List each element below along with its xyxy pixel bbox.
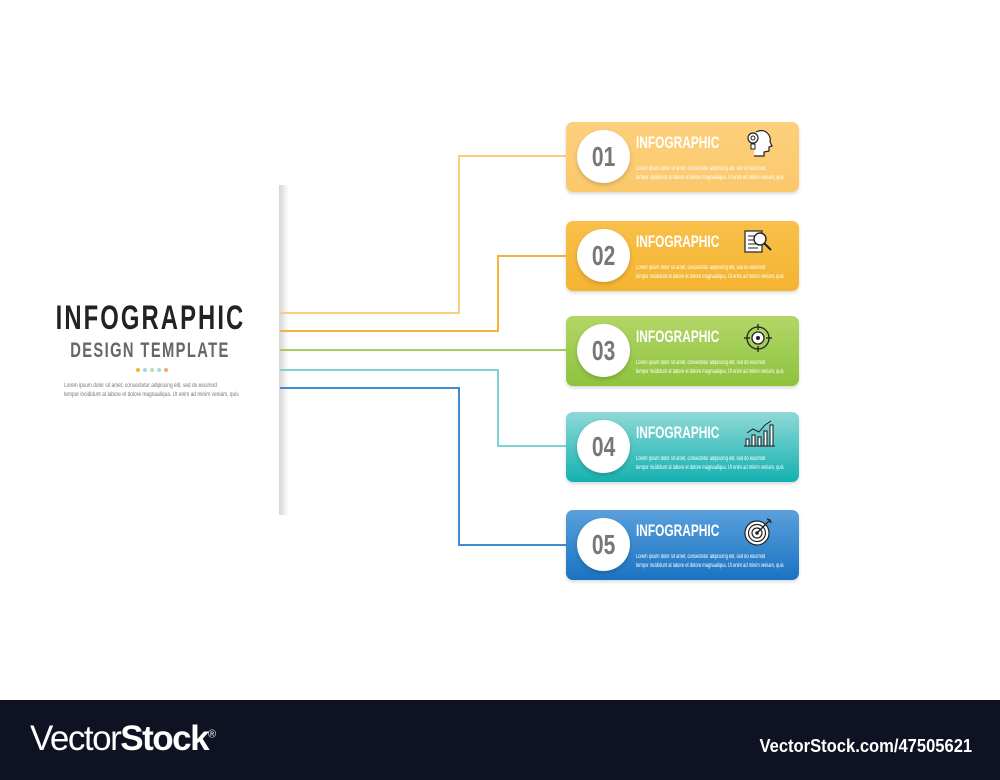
main title: INFOGRAPHIC	[55, 299, 245, 337]
card 02: INFOGRAPHIC	[636, 232, 719, 251]
card 04: 04	[592, 431, 615, 462]
icon: bar chart	[744, 420, 775, 447]
card 05: INFOGRAPHIC	[636, 521, 719, 540]
footer url: VectorStock.com/47505621	[759, 736, 972, 756]
subtitle: DESIGN TEMPLATE	[70, 339, 230, 362]
card 03: INFOGRAPHIC	[636, 327, 719, 346]
description: tempor incididunt at labore et dolore magnaaliqua. Ut enim ad minim veniam, quis	[64, 391, 239, 398]
description: Lorem ipsum dolor sit amet, consectetur adipiscing elit, sed do eiusmod	[64, 382, 217, 389]
card 02: 02	[592, 240, 615, 271]
left panel	[279, 185, 289, 515]
card 04: tempor incididunt at labore et dolore magnaaliqua. Ut enim ad minim veniam, quis	[636, 464, 784, 470]
card 02: tempor incididunt at labore et dolore magnaaliqua. Ut enim ad minim veniam, quis	[636, 274, 784, 280]
card 05	[566, 510, 799, 580]
footer logo: VectorStock®	[30, 719, 215, 758]
card 04	[566, 412, 799, 482]
card 03: Lorem ipsum dolor sit amet, consectetur adipiscing elit, sed do eiusmod	[636, 360, 765, 366]
icon: target gear	[744, 324, 772, 352]
card 01: Lorem ipsum dolor sit amet, consectetur adipiscing elit, sed do eiusmod	[636, 166, 765, 172]
card 05: Lorem ipsum dolor sit amet, consectetur adipiscing elit, sed do eiusmod	[636, 554, 765, 560]
card 02: Lorem ipsum dolor sit amet, consectetur adipiscing elit, sed do eiusmod	[636, 265, 765, 271]
card 04: INFOGRAPHIC	[636, 423, 719, 442]
card 02	[566, 221, 799, 291]
card 04: Lorem ipsum dolor sit amet, consectetur adipiscing elit, sed do eiusmod	[636, 456, 765, 462]
card 01: tempor incididunt at labore et dolore magnaaliqua. Ut enim ad minim veniam, quis	[636, 174, 784, 180]
icon: dartboard	[744, 518, 772, 546]
footer bar	[0, 700, 1000, 780]
card 03	[566, 316, 799, 386]
dots	[136, 368, 168, 372]
icon: head with gear	[747, 130, 773, 157]
card 03: 03	[592, 335, 615, 366]
icon: document search	[744, 230, 772, 253]
card 01: 01	[592, 141, 615, 172]
description	[64, 382, 239, 398]
card 05: 05	[592, 529, 615, 560]
card 05: tempor incididunt at labore et dolore magnaaliqua. Ut enim ad minim veniam, quis	[636, 562, 784, 568]
card 03: tempor incididunt at labore et dolore magnaaliqua. Ut enim ad minim veniam, quis	[636, 368, 784, 374]
card 01	[566, 122, 799, 192]
card 01: INFOGRAPHIC	[636, 133, 719, 152]
